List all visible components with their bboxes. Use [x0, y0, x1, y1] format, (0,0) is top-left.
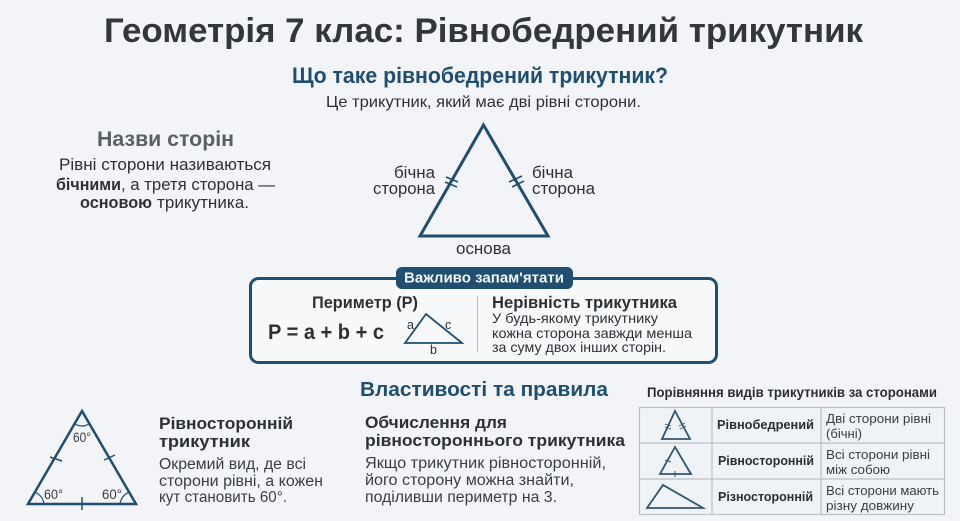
- text: triangle inequality: У будь-якому трикутнику: [492, 310, 658, 326]
- row: scalene: різну довжину: [826, 498, 915, 513]
- angle arcs: [35, 424, 129, 504]
- text: triangle inequality: кожна сторона завжди менша: [492, 325, 692, 341]
- row: scalene: Всі сторони мають: [826, 483, 939, 498]
- comparison table: [639, 407, 945, 515]
- text block: calculation for equilateral triangle: Якщо трикутник рівносторонній,: [365, 455, 606, 472]
- icon: triangle abc: [405, 314, 462, 357]
- formula: P = a + b + c: [268, 320, 384, 344]
- text: names of sides: [56, 156, 275, 212]
- text: names of sides: основою: [80, 194, 152, 212]
- row: scalene: Різносторонній: [718, 489, 813, 504]
- label: base: основа: [456, 239, 512, 258]
- tick marks: right side: [509, 176, 524, 187]
- text: names of sides: трикутника.: [157, 194, 249, 212]
- triangle shape: [420, 125, 548, 236]
- text block: equilateral triangle: [159, 414, 323, 506]
- icon: triangle abc: a: [407, 318, 414, 332]
- text block: calculation for equilateral triangle: Обчислення для: [365, 413, 507, 432]
- tick marks: left side: [445, 177, 458, 187]
- text block: equilateral triangle: Окремий вид, де всі: [159, 456, 306, 473]
- angle labels: 60°: [73, 430, 91, 445]
- panel: names of sides: [56, 127, 275, 212]
- title: Геометрія 7 клас: Рівнобедрений трикутник: [104, 12, 864, 50]
- text block: equilateral triangle: кут становить 60°.: [159, 489, 287, 506]
- angle labels: [44, 430, 122, 502]
- text block: calculation for equilateral triangle: поділивши периметр на 3.: [365, 489, 557, 506]
- text block: equilateral triangle: сторони рівні, а кожен: [159, 473, 323, 490]
- row: isosceles: Рівнобедрений: [717, 417, 814, 432]
- text: names of sides: Рівні сторони називаються: [59, 156, 271, 174]
- row: equilateral: Всі сторони рівні: [826, 447, 930, 462]
- heading: perimeter: Периметр (Р): [312, 294, 418, 312]
- labels: right side: сторона: [532, 179, 596, 198]
- labels: right side: [532, 163, 596, 198]
- heading: names of sides: Назви сторін: [97, 127, 234, 151]
- text: names of sides: бічними: [56, 176, 121, 194]
- text: names of sides: , а третя сторона —: [121, 176, 275, 194]
- heading: comparison table: Порівняння видів трикутників за сторонами: [647, 385, 937, 400]
- text block: calculation for equilateral triangle: [365, 413, 626, 506]
- labels: left side: сторона: [373, 179, 436, 198]
- text block: calculation for equilateral triangle: рівностороннього трикутника: [365, 431, 626, 450]
- definition text: Це трикутник, який має дві рівні сторони.: [326, 94, 641, 111]
- panel frame: [250, 278, 716, 362]
- heading: properties and rules: Властивості та правила: [360, 378, 609, 401]
- badge: Важливо запам'ятати: [404, 270, 564, 286]
- row: scalene: [647, 483, 939, 513]
- labels: left side: [373, 163, 436, 198]
- text: triangle inequality: за суму двох інших сторін.: [492, 339, 666, 355]
- panel: important to remember: [250, 267, 716, 362]
- icon: triangle abc: c: [445, 318, 451, 332]
- row: isosceles: [662, 411, 931, 441]
- angle labels: 60°: [44, 487, 63, 502]
- text block: calculation for equilateral triangle: його сторону можна знайти,: [365, 472, 574, 489]
- badge: [396, 267, 573, 289]
- tick marks: [50, 455, 115, 510]
- row: equilateral: [660, 447, 930, 477]
- angle labels: 60°: [102, 487, 122, 502]
- row: isosceles: Дві сторони рівні: [826, 411, 931, 426]
- text block: equilateral triangle: трикутник: [159, 432, 251, 451]
- diagram: isosceles triangle: [373, 125, 596, 258]
- row: isosceles: (бічні): [826, 426, 862, 441]
- text: triangle inequality: [492, 310, 692, 355]
- row: equilateral: Рівносторонній: [718, 453, 814, 468]
- heading: definition: Що таке рівнобедрений трикутник?: [292, 63, 668, 88]
- labels: left side: бічна: [394, 163, 436, 182]
- diagram: equilateral triangle: [28, 411, 136, 510]
- text block: equilateral triangle: Рівносторонній: [159, 414, 293, 433]
- icon: triangle abc: b: [430, 343, 437, 357]
- heading: triangle inequality: Нерівність трикутника: [492, 294, 678, 312]
- row: equilateral: між собою: [826, 462, 890, 477]
- labels: right side: бічна: [532, 163, 574, 182]
